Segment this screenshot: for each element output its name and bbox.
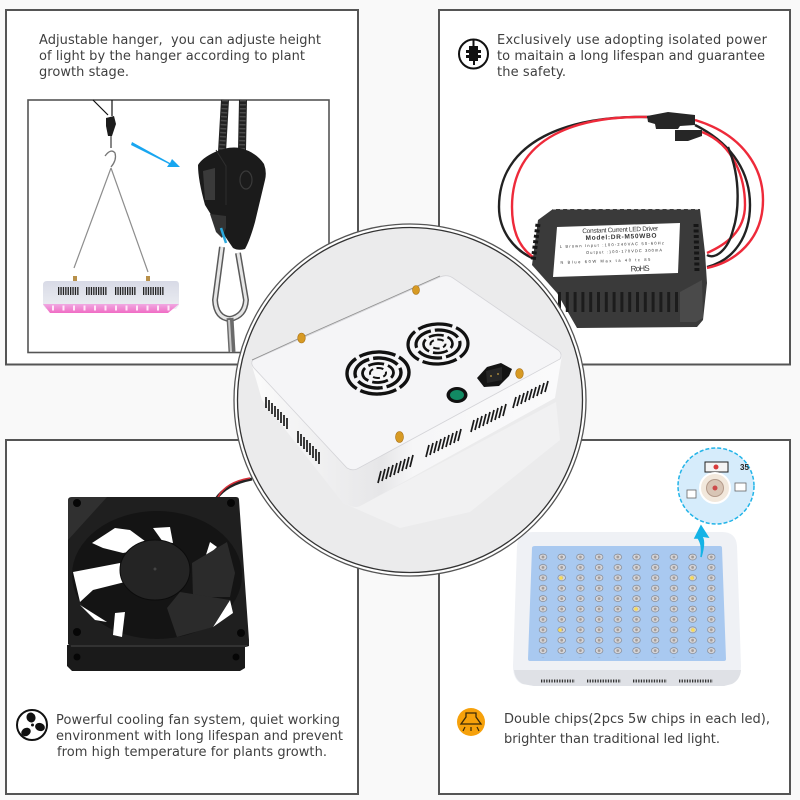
mini grow light [43, 276, 179, 313]
white gaps between fan blades [73, 527, 233, 637]
icon: cyan arrow [695, 526, 708, 557]
chip magnifier: 35 [740, 463, 749, 472]
text: double chips description [504, 712, 770, 747]
panel: cooling fan [6, 440, 358, 794]
photo: cooling fan [67, 497, 249, 671]
text: cooling fan description: Powerful cooling fan system, quiet working [56, 713, 340, 728]
driver label: Model:DR-M50WBO [585, 233, 657, 242]
icon: fan [17, 710, 47, 740]
panel: isolated power driver [439, 10, 790, 364]
image frame: hanger photos [28, 100, 329, 352]
large rope ratchet [198, 100, 266, 250]
driver label [553, 223, 680, 277]
small pulley and hanging cords [93, 100, 116, 167]
fan grille 1 [346, 351, 410, 395]
driver label: L Brown Input :100-240VAC 50-60Hz [560, 240, 664, 249]
icon: power driver [459, 39, 488, 68]
power socket [477, 363, 512, 387]
text: isolated power description: the safety. [497, 65, 566, 80]
LED driver box [532, 208, 707, 328]
carabiner clip [215, 247, 246, 352]
wire connector [647, 112, 702, 141]
text: double chips description: Double chips(2pcs 5w chips in each led), [504, 712, 770, 727]
photo: LED panel front [513, 532, 741, 686]
hanging wires [74, 168, 148, 272]
text: adjustable hanger description: growth stage. [39, 65, 129, 80]
driver wires [499, 117, 763, 268]
lit fan blades [167, 542, 235, 637]
text: isolated power description: Exclusively use adopting isolated power [497, 33, 768, 48]
driver label: Output :100-170VDC 300mA [586, 247, 662, 255]
text: adjustable hanger description: Adjustable hanger, you can adjuste height [39, 33, 321, 48]
panel: adjustable hanger [6, 10, 358, 364]
text: cooling fan description: environment with long lifespan and prevent [56, 729, 343, 744]
text: cooling fan description [56, 713, 343, 760]
green switch [446, 387, 468, 403]
text: double chips description: brighter than traditional led light. [504, 732, 720, 747]
driver label: Constant Current LED Driver [582, 225, 659, 235]
fan wire [216, 479, 252, 499]
text: isolated power description: to maitain a long lifespan and guarantee [497, 49, 765, 64]
icon: blue arrow [131, 142, 180, 167]
fan grille 2 [407, 323, 469, 365]
icon: lamp on orange circle [457, 708, 485, 736]
center circle: rear view of grow light [234, 224, 586, 576]
light body [251, 275, 562, 528]
text: adjustable hanger description: of light by the hanger according to plant [39, 49, 305, 64]
panel: double chips [439, 440, 790, 794]
text: isolated power description [497, 33, 768, 80]
driver label: N Blue 60W Max ta 40 tc 85 [560, 257, 651, 265]
text: cooling fan description: from high temperature for plants growth. [57, 745, 327, 760]
side vents [266, 381, 548, 483]
text: adjustable hanger description [39, 33, 321, 80]
chip magnifier [678, 448, 754, 524]
gold mounting pegs [298, 286, 523, 442]
driver label: RoHS [631, 264, 650, 273]
